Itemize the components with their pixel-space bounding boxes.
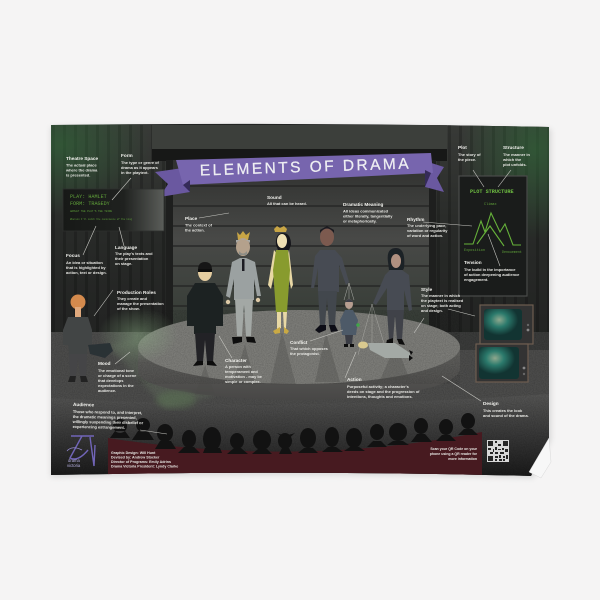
text: language [115, 245, 153, 266]
text: focus [66, 253, 107, 275]
plot structure poster: Exposition [464, 248, 485, 253]
text: focus: that is highlighted by [66, 265, 106, 270]
text: sound: All that can be heard. [267, 201, 307, 206]
text: dramatic meaning: either literally, tangentially [343, 214, 393, 218]
text: style: The manner in which [421, 293, 461, 298]
text: credits: Devised by: Andrew Stocker [111, 456, 160, 460]
lintel top band [152, 125, 447, 149]
text: tension: of action deepening audience [464, 272, 520, 277]
text: place [185, 216, 213, 232]
text: production roles: of the show. [117, 306, 140, 311]
figure shadows [195, 332, 410, 395]
script screen: HAMLET THE PLAY'S THE THING [70, 209, 112, 213]
text: credits [111, 451, 178, 468]
text: theatre space: is presented. [66, 172, 90, 178]
poster corner curl [529, 438, 551, 478]
text: qr instructions: more information [448, 457, 477, 461]
poster shadow [51, 126, 551, 478]
text: audience: willingly suspending their disbelief or [72, 419, 144, 425]
text: character [225, 358, 263, 384]
text: action [347, 377, 420, 399]
stage platform [138, 310, 460, 400]
text: focus: An idea or situation [66, 260, 103, 265]
figure: dark-skinned actor [311, 226, 349, 333]
text: plot: Plot [458, 145, 467, 150]
text: dramatic meaning: All ideas communicated [343, 208, 389, 214]
text: language: Language [115, 245, 138, 250]
text: character: A person with [225, 364, 251, 369]
text: tension: Tension [464, 260, 482, 265]
text: mood: audience. [98, 388, 116, 393]
text: audience: the dramatic meanings presented, [73, 414, 137, 420]
centre plank wall [166, 160, 436, 335]
text: conflict [290, 340, 329, 356]
text: audience: Audience [73, 402, 95, 407]
text: structure: which the [502, 157, 522, 162]
text: action: intentions, thoughts and emotions. [347, 394, 413, 399]
text: conflict: That which opposes [290, 346, 329, 351]
back wall [51, 124, 549, 236]
text: tension: The build in the importance [464, 267, 516, 272]
mood glow [98, 307, 178, 363]
text: action: Action [347, 377, 362, 382]
text: dramatic meaning: or metaphorically. [343, 218, 377, 224]
text: form [121, 153, 160, 175]
figure: man in black [187, 262, 223, 366]
text: dramatic meaning: Dramatic Meaning [343, 202, 384, 207]
text: style: Style [421, 287, 433, 292]
text: place: the action. [185, 228, 205, 232]
text: conflict: Conflict [290, 340, 308, 345]
text: audience [72, 402, 144, 430]
text: credits: Drama Victoria President: Lyndy Clarke [111, 464, 178, 468]
text: form: drama as it appears [121, 165, 159, 170]
title: ELEMENTS OF DRAMA [200, 156, 411, 179]
text: form: in the playtext. [121, 170, 149, 175]
audience silhouettes [110, 413, 478, 454]
figure: puppet on strings [340, 283, 360, 347]
text: structure: The manner in [503, 152, 531, 157]
text: production roles: Production Roles [117, 290, 156, 295]
text: mood: that develops [98, 378, 124, 383]
floor [51, 332, 549, 404]
figure: lying body [358, 342, 413, 361]
text: action: deeds on stage and the progression of [347, 389, 420, 394]
plot structure poster: Climax [484, 202, 497, 207]
text: rhythm: The underlying pace, [407, 223, 446, 228]
text: structure: plot unfolds. [503, 162, 527, 167]
text: mood [98, 361, 137, 393]
text: character: Character [225, 358, 247, 363]
text: place: The context of [185, 222, 213, 228]
text: sound [267, 195, 307, 206]
script screen: Wherein I'll catch the conscience of the king [70, 218, 133, 221]
text: qr instructions: Scan your QR Code on your [430, 447, 478, 451]
plot structure poster: PLOT STRUCTURE [470, 189, 514, 195]
TV top [480, 305, 533, 344]
text: style: on stage; both acting [421, 303, 461, 308]
text: theatre space: where the drama [65, 168, 98, 172]
TV bottom [476, 344, 528, 382]
text: mood: expectations in the [98, 383, 134, 388]
text: character: temperament and [225, 369, 258, 374]
text: rhythm: of word and action. [407, 233, 443, 238]
text: focus: Focus [66, 253, 80, 258]
text: rhythm: variation or regularity [407, 228, 448, 233]
ribbon banner [155, 153, 444, 197]
text: language: The play's texts and [115, 251, 153, 256]
text: form: Form [121, 153, 133, 158]
right tail [425, 161, 444, 192]
text: character: simple or complex. [225, 379, 261, 384]
red seats [108, 432, 482, 475]
floor glow [156, 391, 196, 409]
text: structure [502, 145, 531, 167]
text: production roles: They create and [117, 296, 148, 301]
text: mood: Mood [98, 361, 111, 366]
script screen: FORM: TRAGEDY [70, 201, 110, 207]
figure: queen [268, 226, 293, 334]
text: design: This creates the look [483, 408, 523, 413]
poster background [51, 124, 549, 476]
QR code [487, 440, 509, 462]
text: form: The type or genre of [121, 160, 160, 165]
text: qr instructions: phone using a QR reader for [430, 452, 478, 456]
figure: production crew [63, 294, 113, 382]
logo: drama victoria: victoria [67, 463, 81, 468]
logo: drama victoria [67, 436, 95, 468]
text: plot [458, 145, 481, 162]
seated heads [132, 418, 154, 440]
TV sets [476, 305, 533, 382]
text: design: Design [483, 401, 499, 406]
text: theatre space: The actual place [66, 162, 97, 168]
text: language: on stage. [115, 261, 132, 266]
text: audience: Those who respond to, and interpret, [73, 409, 142, 415]
text: rhythm: Rhythm [407, 217, 424, 222]
text: theatre space [65, 156, 98, 178]
text: credits: Director of Programs: Emily Adrins [111, 460, 171, 464]
text: character: motivation - may be [225, 374, 263, 379]
plot structure poster [459, 176, 527, 296]
mood light beam [108, 330, 215, 408]
script screen: PLAY: HAMLET [70, 194, 107, 200]
text: action: Purposeful activity; a character's [347, 384, 410, 389]
text: theatre space: Theatre Space [66, 156, 98, 161]
leader lines [83, 170, 511, 434]
text: structure: Structure [503, 145, 524, 150]
main ribbon [176, 153, 433, 185]
text: dramatic meaning [343, 202, 393, 224]
text: design [483, 401, 529, 418]
text: style [421, 287, 464, 313]
text: rhythm [407, 217, 448, 238]
plot structure poster: Denouement [502, 250, 522, 254]
text: production roles: manage the presentation [117, 301, 164, 306]
text: production roles [117, 290, 164, 311]
seated heads [110, 419, 130, 438]
text: credits: Graphic Design: Will Hunt [111, 451, 156, 455]
figure: woman controlling strings [358, 248, 412, 355]
script screen [63, 189, 164, 231]
audience band [51, 394, 549, 480]
text: design: and sound of the drama. [483, 413, 529, 418]
text: tension: engagement. [464, 277, 488, 282]
text: conflict: the protagonist. [290, 351, 320, 356]
text: language: their presentation [115, 256, 149, 261]
text: mood: or charge of a scene [98, 373, 137, 378]
text: style: the playtext is realised [421, 298, 464, 303]
text: audience: experiencing estrangement. [73, 424, 125, 430]
text: place: Place [185, 216, 198, 221]
text: qr instructions [430, 447, 478, 461]
text: style: and design. [421, 308, 443, 313]
text: focus: action, text or design. [66, 270, 107, 275]
text: plot: the piece. [458, 157, 476, 162]
left tail [155, 167, 190, 197]
floor noise [51, 332, 549, 444]
text: tension [464, 260, 520, 282]
text: mood: The emotional tone [98, 368, 135, 373]
text: plot: The story of [458, 152, 481, 157]
logo: drama victoria: drama [68, 458, 81, 463]
text: sound: Sound [267, 195, 282, 200]
figure: king [226, 231, 261, 344]
